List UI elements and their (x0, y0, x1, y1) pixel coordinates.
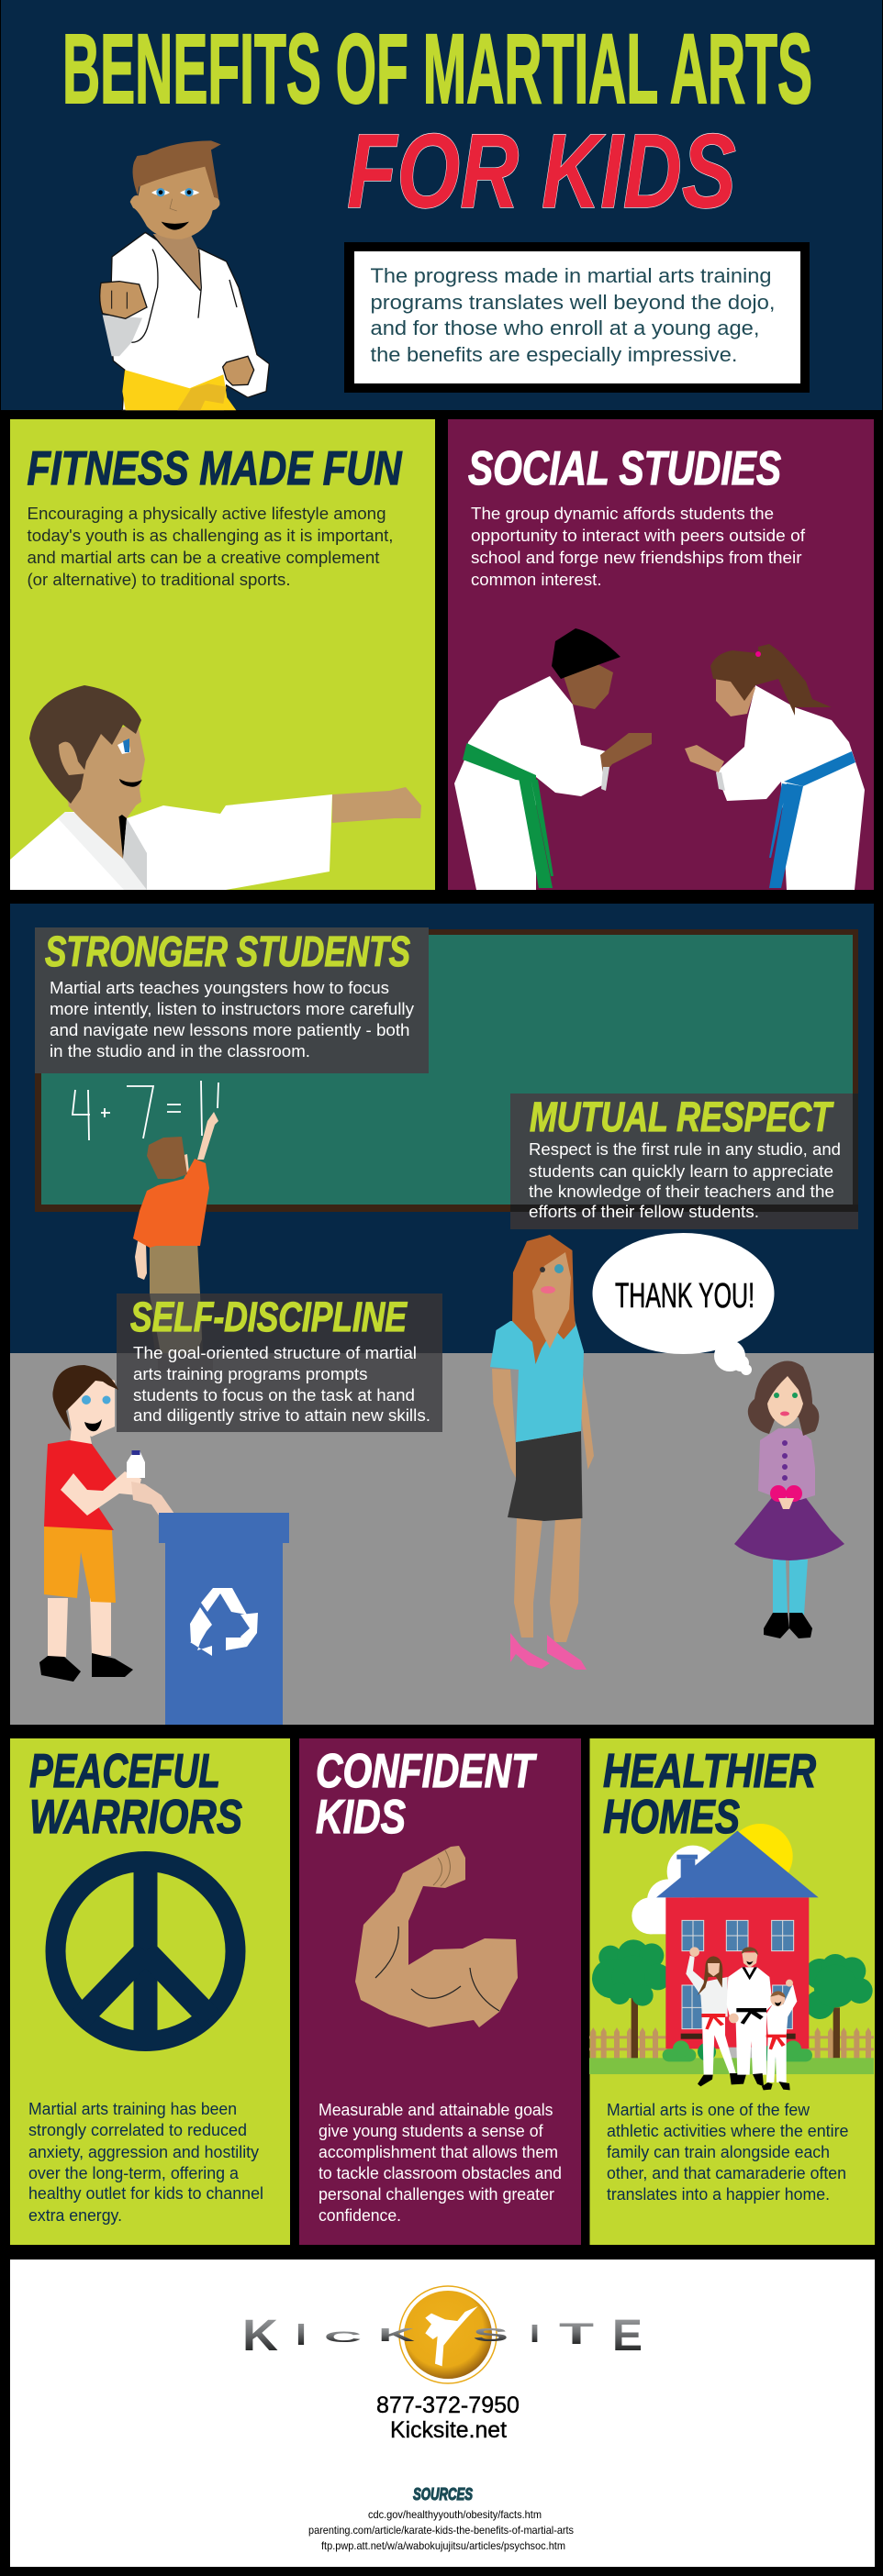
subtitle: for kids: FOR KIDS (347, 113, 736, 230)
body text: Measurable and attainable goals (319, 2101, 553, 2119)
heading (29, 1745, 242, 1844)
intro callout: The progress made in martial arts training (371, 264, 771, 287)
callout: self-discipline: SELF-DISCIPLINE (130, 1294, 408, 1340)
body text: other, and that camaraderie often (607, 2164, 846, 2182)
body text: family can train alongside each (607, 2143, 830, 2161)
heading: HEALTHIER (603, 1745, 816, 1798)
body text (319, 2101, 562, 2225)
body text: translates into a happier home. (607, 2185, 830, 2204)
speech bubble (593, 1233, 775, 1375)
logo: kicksite (242, 2286, 643, 2383)
callout: self-discipline: The goal-oriented structure of martial (133, 1344, 417, 1362)
heading: CONFIDENT (316, 1745, 537, 1798)
heading (316, 1745, 537, 1844)
body text: The group dynamic affords students the (471, 505, 774, 523)
illustration: house and family (589, 1824, 874, 2090)
heading: PEACEFUL (29, 1745, 220, 1798)
body text: today's youth is as challenging as it is important, (28, 527, 393, 545)
heading: HOMES (603, 1791, 740, 1844)
sources list: parenting.com/article/karate-kids-the-benefits-of-martial-arts (308, 2524, 574, 2537)
chalk equation drawing (73, 1081, 218, 1140)
callout: mutual respect (510, 1094, 858, 1229)
heading (603, 1745, 816, 1844)
intro callout (344, 242, 810, 393)
callout: self-discipline (117, 1294, 442, 1432)
panel: header (1, 0, 882, 410)
icon: karate boy (100, 140, 269, 410)
body text: athletic activities where the entire (607, 2122, 848, 2140)
logo: kicksite: T (559, 2317, 595, 2350)
family: child (762, 1980, 797, 2090)
body text: common interest. (471, 571, 602, 589)
body text: extra energy. (28, 2206, 122, 2225)
panel: social studies (448, 419, 874, 890)
body text: Martial arts training has been (28, 2100, 237, 2118)
logo: kicksite: S (473, 2326, 509, 2346)
sources list: ftp.pwp.att.net/w/a/wabokujujitsu/articles/psychsoc.htm (321, 2539, 565, 2552)
panel: classroom scene (10, 904, 874, 1725)
body text: and martial arts can be a creative complement (28, 549, 380, 567)
logo: kicksite: I (530, 2319, 540, 2348)
panel: footer (10, 2260, 875, 2567)
body text (28, 2100, 263, 2225)
body text: to tackle classroom obstacles and (319, 2164, 562, 2182)
body text: anxiety, aggression and hostility (28, 2143, 259, 2161)
callout: stronger students: in the studio and in the classroom. (50, 1042, 310, 1060)
panel: peaceful warriors (10, 1738, 290, 2245)
intro callout: and for those who enroll at a young age, (371, 316, 760, 339)
house (665, 1897, 809, 2049)
body text: healthy outlet for kids to channel (28, 2184, 263, 2203)
callout: mutual respect: students can quickly learn to appreciate (529, 1162, 833, 1181)
callout: self-discipline: arts training programs prompts (133, 1365, 367, 1383)
logo: kicksite: C (324, 2328, 362, 2346)
callout: self-discipline: and diligently strive to attain new skills. (133, 1406, 430, 1425)
fence (589, 2027, 874, 2059)
panel: confident kids (299, 1738, 581, 2245)
body text (28, 505, 393, 589)
callout: stronger students: and navigate new lessons more patiently - both (50, 1021, 409, 1039)
intro callout: programs translates well beyond the dojo, (371, 291, 775, 314)
sun (728, 1824, 793, 1889)
family: woman (686, 1947, 746, 2086)
callout: mutual respect: Respect is the first rule in any studio, and (529, 1140, 841, 1159)
body text: confidence. (319, 2206, 401, 2225)
logo: kicksite: K (242, 2312, 278, 2360)
body text: personal challenges with greater (319, 2185, 554, 2204)
heading: FITNESS MADE FUN (28, 442, 403, 495)
intro callout: the benefits are especially impressive. (371, 343, 738, 366)
family: father (727, 1947, 773, 2086)
grass and bushes (589, 2040, 874, 2074)
sources heading: SOURCES (413, 2485, 473, 2504)
icon: recycling bin (159, 1513, 289, 1725)
icon: peace sign (55, 1861, 235, 2041)
heading: KIDS (316, 1791, 406, 1844)
callout: stronger students: Martial arts teaches youngsters how to focus (50, 979, 389, 997)
website: Kicksite.net (390, 2417, 507, 2443)
logo: kicksite: E (612, 2312, 643, 2360)
sources list (308, 2508, 574, 2552)
callout: stronger students: STRONGER STUDENTS (45, 927, 410, 975)
icon: flexed arm (355, 1846, 518, 2027)
phone number: 877-372-7950 (376, 2393, 520, 2418)
icon: boy at the board (133, 1112, 218, 1373)
body text: accomplishment that allows them (319, 2143, 558, 2161)
panel: fitness made fun (10, 419, 435, 890)
icon: boy with bottle (39, 1365, 181, 1682)
body text: give young students a sense of (319, 2122, 543, 2140)
trees (592, 1939, 873, 2060)
icon: bowing girl (685, 644, 865, 890)
heading: WARRIORS (29, 1791, 242, 1844)
icon: girl (734, 1360, 844, 1638)
callout: stronger students (35, 927, 429, 1073)
callout: self-discipline: students to focus on the task at hand (133, 1386, 415, 1405)
body text: strongly correlated to reduced (28, 2121, 247, 2139)
logo: kicksite: K (378, 2326, 417, 2346)
heading: SOCIAL STUDIES (468, 442, 781, 495)
sources list: cdc.gov/healthyyouth/obesity/facts.htm (368, 2508, 542, 2521)
icon: recycling symbol (190, 1588, 258, 1656)
callout: mutual respect: efforts of their fellow students. (529, 1203, 759, 1221)
body text: (or alternative) to traditional sports. (28, 571, 290, 589)
body text: Encouraging a physically active lifestyle among (28, 505, 386, 523)
body text: Martial arts is one of the few (607, 2101, 810, 2119)
icon: bowing boy (454, 628, 652, 890)
callout: stronger students: more intently, listen to instructors more carefully (50, 1000, 414, 1018)
icon: punching boy (10, 685, 421, 890)
callout: mutual respect: the knowledge of their teachers and the (529, 1183, 834, 1201)
body text: school and forge new friendships from their (471, 549, 802, 567)
panel: healthier homes (589, 1738, 875, 2245)
body text (471, 505, 806, 589)
body text: opportunity to interact with peers outside of (471, 527, 806, 545)
logo: kicksite: I (296, 2317, 307, 2351)
icon: teacher (490, 1235, 594, 1670)
speech bubble: THANK YOU! (615, 1277, 754, 1316)
body text: over the long-term, offering a (28, 2164, 240, 2182)
body text (607, 2101, 848, 2204)
chalkboard (35, 929, 858, 1212)
cloud (632, 1846, 719, 1934)
